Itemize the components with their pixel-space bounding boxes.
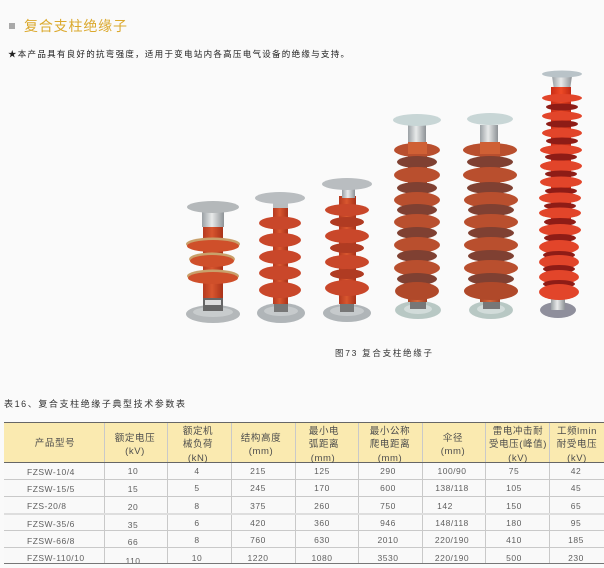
table header: (kV) [125,446,145,457]
icon: title square [9,23,15,29]
table header background [4,422,604,462]
table row FZSW-15/5: 600 [380,483,396,493]
table header: 雷电冲击耐 [493,425,543,437]
table header: 额定机 [183,425,213,437]
table row FZSW-10/4: 4 [194,466,200,476]
table row FZSW-35/6: 35 [128,520,138,530]
table body background [4,462,604,563]
table header: 工频lmin [557,425,597,437]
table row FZSW-110/10: 3530 [378,553,398,563]
table header: 产品型号 [35,437,75,449]
table row FZS-20/8: FZS-20/8 [27,501,66,511]
table header: (mm) [249,446,273,457]
table row FZSW-15/5: 105 [506,483,522,493]
table row FZSW-66/8: 66 [128,537,138,547]
table title: 表16、复合支柱绝缘子典型技术参数表 [4,398,185,409]
table row FZSW-15/5: FZSW-15/5 [27,484,75,494]
insulator 5 [463,113,518,319]
table row FZSW-15/5: 5 [194,483,200,493]
table row FZSW-66/8: 630 [314,535,330,545]
table row FZSW-110/10: 220/190 [435,553,469,563]
table row FZSW-110/10: 500 [506,553,522,563]
table row FZS-20/8: 8 [194,501,200,511]
insulator 2 [255,192,305,323]
table row FZSW-110/10: 10 [192,553,202,563]
table row FZS-20/8: 65 [571,501,581,511]
table row FZSW-35/6: 360 [314,518,330,528]
table row FZSW-10/4: 100/90 [438,466,466,476]
parameter table [4,422,604,566]
table row FZSW-35/6: 95 [571,518,581,528]
table row FZSW-15/5 [27,483,581,494]
table row FZSW-66/8: 8 [194,535,200,545]
table row FZSW-66/8: 220/190 [435,535,469,545]
table row FZSW-10/4: 125 [314,466,330,476]
table header: 受电压(峰值) [489,438,547,450]
table row FZSW-10/4: FZSW-10/4 [27,467,75,477]
insulator 1 [186,201,240,323]
table row FZSW-35/6: 946 [380,518,396,528]
table row FZS-20/8: 375 [250,501,266,511]
product photo: composite post insulators [186,70,582,323]
table row FZS-20/8: 260 [314,501,330,511]
insulator 4 [393,114,441,319]
table row FZSW-66/8: 185 [568,535,584,545]
table row FZS-20/8: 150 [506,501,522,511]
table row FZSW-66/8: 2010 [378,535,398,545]
table row FZSW-66/8 [27,535,584,547]
table row FZSW-10/4: 10 [128,466,138,476]
table row FZSW-110/10: 230 [568,553,584,563]
table row FZSW-10/4 [27,466,581,477]
table header: 额定电压 [115,432,155,444]
table row FZSW-66/8: 410 [506,535,522,545]
intro text: ★本产品具有良好的抗弯强度，适用于变电站内各高压电气设备的绝缘与支持。 [8,49,349,59]
table row FZSW-10/4: 42 [571,466,581,476]
table row FZSW-110/10: 1080 [312,553,332,563]
table row FZSW-110/10 [27,553,584,566]
title: 复合支柱绝缘子 [24,18,127,34]
insulator 6 [539,70,582,318]
table row FZS-20/8: 750 [380,501,396,511]
table row FZS-20/8: 20 [128,502,138,512]
table row FZSW-15/5: 15 [128,484,138,494]
table row FZSW-35/6 [27,518,581,530]
table row FZSW-66/8: FZSW-66/8 [27,536,75,546]
table row FZSW-15/5: 138/118 [435,483,469,493]
table header: 耐受电压 [557,438,597,450]
table row FZSW-35/6: 180 [506,518,522,528]
table row FZSW-35/6: FZSW-35/6 [27,519,75,529]
table header: (kV) [508,453,528,464]
table header: (mm) [311,453,335,464]
table row FZSW-15/5: 245 [250,483,266,493]
figure caption: 图73 复合支柱绝缘子 [335,348,432,358]
table header: 爬电距离 [370,438,410,450]
table row FZSW-35/6: 6 [194,518,200,528]
table row FZSW-110/10: 1220 [248,553,268,563]
table row FZSW-10/4: 75 [509,466,519,476]
table row FZSW-35/6: 148/118 [435,518,469,528]
table row FZSW-15/5: 45 [571,483,581,493]
insulator 3 [322,178,372,322]
table header: 械负荷 [183,438,213,450]
table header: (kN) [188,453,208,464]
table row FZSW-35/6: 420 [250,518,266,528]
table header: 最小电 [309,425,339,437]
table header: (mm) [441,446,465,457]
table header: (kV) [567,453,587,464]
table header [35,425,597,464]
table header: 伞径 [443,432,463,444]
table row FZSW-110/10: 110 [125,556,141,566]
table row FZSW-10/4: 215 [250,466,266,476]
table row FZS-20/8 [27,501,581,512]
table header: 弧距离 [309,438,339,450]
table header: 结构高度 [241,432,281,444]
table row FZSW-10/4: 290 [380,466,396,476]
table row FZSW-110/10: FZSW-110/10 [27,553,85,563]
table header: (mm) [378,453,402,464]
table row FZSW-15/5: 170 [314,483,330,493]
table row FZS-20/8: 142 [437,501,453,511]
table header: 最小公称 [370,425,410,437]
table row FZSW-66/8: 760 [250,535,266,545]
